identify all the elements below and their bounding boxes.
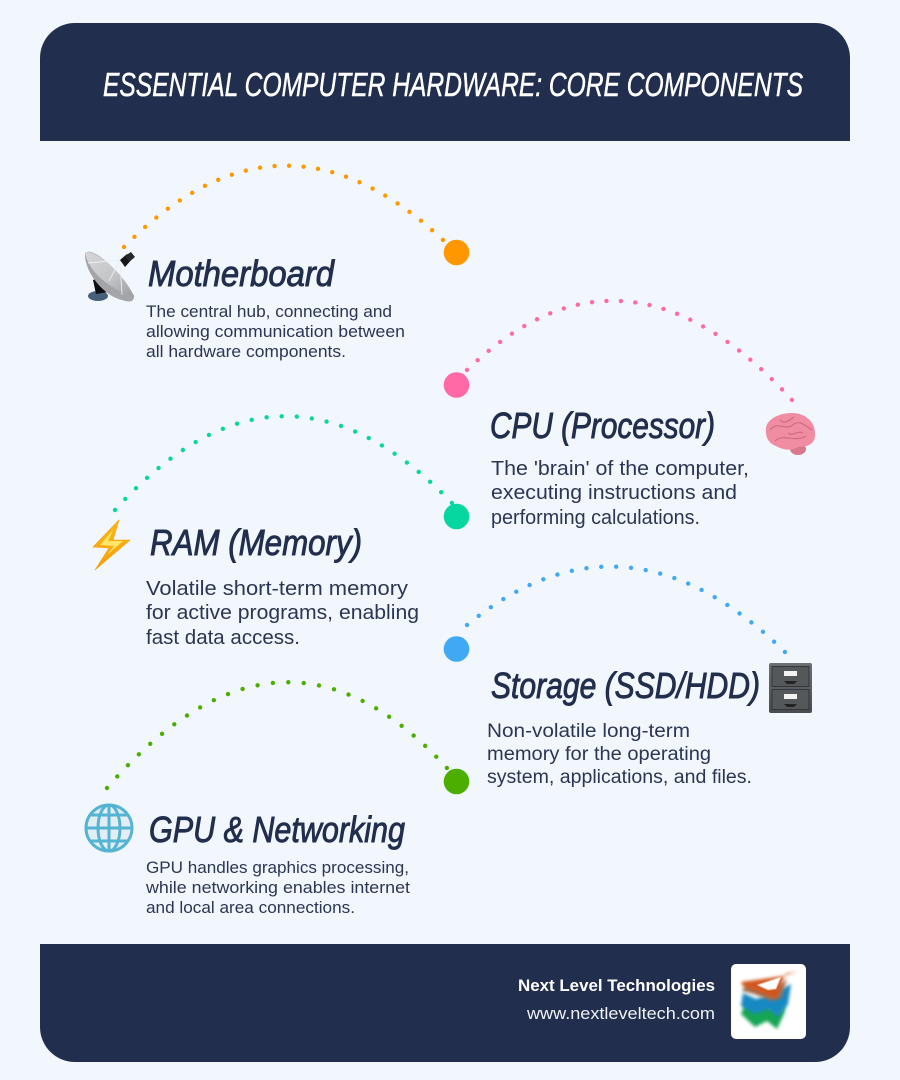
dotted arc: motherboard	[124, 166, 443, 247]
heading: cpu: CPU (Processor)	[490, 405, 715, 446]
panel: gpu and networking	[86, 682, 469, 917]
description: gpu	[145, 858, 410, 917]
node: pink	[444, 372, 469, 398]
icon: file cabinet	[769, 663, 812, 713]
heading: gpu: GPU & Networking	[149, 809, 405, 850]
panel: motherboard	[85, 166, 469, 361]
description: cpu: executing instructions and	[491, 481, 737, 504]
heading: ram: RAM (Memory)	[150, 522, 362, 563]
description: gpu: and local area connections.	[146, 898, 355, 917]
description: cpu	[491, 457, 749, 529]
icon: brain	[766, 413, 815, 455]
footer banner	[40, 944, 850, 1062]
description: gpu: while networking enables internet	[145, 878, 410, 897]
dotted arc: gpu	[107, 682, 447, 788]
heading: motherboard: Motherboard	[148, 253, 335, 294]
description: cpu: performing calculations.	[491, 506, 700, 529]
dotted arc: ram	[115, 416, 452, 510]
node: teal	[444, 504, 469, 529]
dotted arc: cpu	[467, 301, 792, 400]
node: green	[444, 769, 469, 794]
logo	[731, 964, 806, 1039]
icon: globe	[86, 805, 132, 851]
icon: lightning bolt	[93, 520, 130, 570]
description: ram	[146, 577, 419, 649]
website: www.nextleveltech.com	[526, 1005, 715, 1023]
description: motherboard: all hardware components.	[146, 342, 346, 361]
description: storage	[487, 721, 752, 788]
description: storage: system, applications, and files.	[487, 767, 752, 788]
panel: cpu	[444, 301, 815, 529]
description: storage: memory for the operating	[487, 744, 711, 765]
description: motherboard: The central hub, connecting and	[146, 302, 392, 321]
description: cpu: The 'brain' of the computer,	[491, 457, 749, 480]
icon: satellite dish	[85, 252, 135, 301]
heading: storage: Storage (SSD/HDD)	[491, 665, 760, 706]
node: orange	[444, 240, 469, 265]
description: ram: fast data access.	[146, 626, 300, 649]
description: motherboard: allowing communication between	[146, 322, 405, 341]
panel: ram	[93, 416, 469, 649]
company name: Next Level Technologies	[518, 977, 715, 995]
description: motherboard	[146, 302, 405, 361]
description: ram: for active programs, enabling	[146, 601, 419, 624]
panel: storage	[444, 567, 812, 788]
description: gpu: GPU handles graphics processing,	[146, 858, 409, 877]
description: storage: Non-volatile long-term	[487, 721, 690, 742]
description: ram: Volatile short-term memory	[146, 577, 409, 600]
header banner	[40, 23, 850, 141]
dotted arc: storage	[467, 567, 785, 652]
node: blue	[444, 636, 469, 662]
